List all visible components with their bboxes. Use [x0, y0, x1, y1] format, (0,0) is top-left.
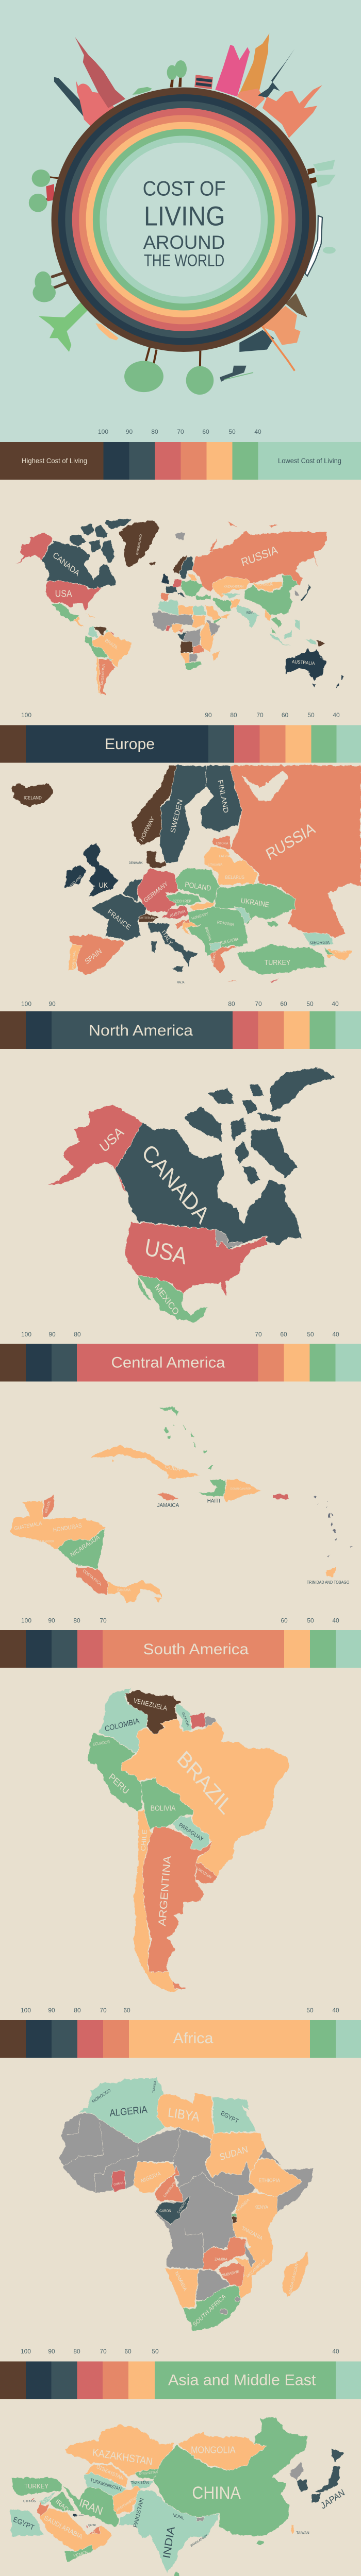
- South America country labels: PERU: [107, 1771, 131, 1797]
- Europe country labels: SWITZERLAND: [139, 917, 156, 920]
- Asia country labels: IRAQ: [54, 2497, 70, 2514]
- Africa country labels: LIBYA: [167, 2105, 200, 2125]
- map: world: [14, 518, 344, 696]
- Africa country labels: KENYA: [254, 2204, 268, 2210]
- legend bar: Asia and Middle East: [0, 2348, 361, 2399]
- world country labels: AUSTRALIA: [292, 659, 315, 666]
- North America country labels: CANADA: [137, 1139, 214, 1229]
- Europe country labels: CZECH REP: [173, 900, 191, 904]
- Central America country labels: JAMAICA: [157, 1502, 179, 1509]
- Asia country labels: JAPAN: [319, 2487, 347, 2511]
- legend bar: Africa: 90: [48, 2007, 55, 2014]
- legend bar: highest to lowest cost of living: Lowest Cost of Living: [278, 456, 341, 465]
- legend bar: North America: [0, 1001, 361, 1049]
- title: COST OF: [143, 177, 225, 200]
- Europe country labels: BELARUS: [225, 875, 244, 880]
- Central America country labels: EL SALVADOR: [36, 1540, 54, 1544]
- Asia country labels: QATAR: [88, 2524, 96, 2527]
- legend bar: Europe: [0, 711, 361, 762]
- Europe country labels: PORTUGAL: [72, 950, 76, 970]
- legend bar: Africa: 80: [74, 2007, 81, 2014]
- Central America country labels: [14, 1463, 349, 1592]
- Europe country labels: ESTONIA: [216, 842, 228, 845]
- Europe country labels: DENMARK: [129, 862, 143, 865]
- Africa country labels: GHANA: [113, 2181, 124, 2187]
- Asia country labels: UZBEKISTAN: [95, 2464, 124, 2482]
- Africa country labels: ETHIOPIA: [258, 2178, 281, 2184]
- Europe country labels: POLAND: [185, 880, 212, 892]
- world country labels: USA: [55, 588, 72, 599]
- legend bar: Europe: 80: [230, 711, 237, 719]
- Central America country labels: TRINIDAD AND TOBAGO: [307, 1580, 349, 1585]
- Asia country labels: YEMEN: [73, 2549, 88, 2559]
- legend bar: Central America: [0, 1331, 361, 1382]
- Europe country labels: MALTA: [177, 981, 185, 985]
- title: LIVING: [144, 201, 225, 231]
- Africa country labels: UGANDA: [236, 2197, 251, 2213]
- Asia country labels: [12, 2444, 347, 2560]
- Europe country labels: FINLAND: [216, 779, 229, 814]
- legend bar: Europe: Europe: [105, 736, 155, 753]
- Africa country labels: SUDAN: [219, 2143, 249, 2163]
- Central America country labels: HAITI: [207, 1498, 220, 1504]
- Asia country labels: PAKISTAN: [133, 2498, 145, 2529]
- Africa country shapes: [59, 2078, 313, 2331]
- Asia country labels: AFGHANISTAN: [116, 2496, 137, 2512]
- legend bar: Europe: 50: [307, 711, 315, 719]
- landmarks on top of globe: [29, 33, 336, 395]
- world country labels: CANADA: [51, 550, 81, 579]
- legend bar: Europe: 70: [256, 711, 264, 719]
- legend bar: Central America: 40: [332, 1331, 339, 1338]
- legend bar: North America: North America: [89, 1022, 193, 1039]
- legend bar: Central America: 80: [74, 1331, 81, 1338]
- North America country labels: [97, 1124, 214, 1317]
- world country labels: GREENLAND: [136, 534, 143, 555]
- Asia country labels: CYPRUS: [23, 2499, 36, 2503]
- Africa country labels: ZAMBIA: [215, 2257, 227, 2261]
- Europe country labels: LATVIA: [219, 855, 230, 858]
- Asia country labels: UAE: [90, 2531, 96, 2534]
- South America country labels: URUGUAY: [196, 1866, 213, 1880]
- South America country labels: VENEZUELA: [133, 1697, 168, 1712]
- legend bar: Asia and Middle East: 70: [100, 2348, 107, 2355]
- South America country labels: COLOMBIA: [104, 1716, 140, 1733]
- world country labels: MONGOLIA: [257, 583, 273, 586]
- Africa country labels: SOUTH AFRICA: [192, 2293, 227, 2328]
- legend bar: Asia and Middle East: 80: [73, 2348, 80, 2355]
- Europe country labels: GREECE: [211, 951, 217, 965]
- legend bar: Asia and Middle East: 100: [21, 2348, 31, 2355]
- Europe country labels: [24, 779, 347, 985]
- Asia country labels: TURKMENISTAN: [90, 2477, 122, 2492]
- legend bar: Africa: 40: [332, 2007, 339, 2014]
- Europe country labels: NORWAY: [139, 816, 156, 843]
- South America country labels: BOLIVIA: [151, 1804, 175, 1812]
- Asia country labels: EGYPT: [12, 2515, 35, 2532]
- Central America country labels: GUATEMALA: [14, 1520, 43, 1532]
- legend bar: Central America: 100: [21, 1331, 31, 1338]
- Africa country labels: NAMIBIA: [174, 2270, 188, 2293]
- Central America country labels: CUBA: [165, 1463, 181, 1473]
- Asia country labels: KAZAKHSTAN: [92, 2447, 153, 2468]
- Europe country labels: TURKEY: [265, 958, 290, 967]
- Africa country labels: GABON: [159, 2209, 171, 2213]
- Africa country labels: ZIMBABWE: [221, 2269, 240, 2278]
- Africa country labels: CONGO: [177, 2201, 187, 2214]
- legend bar: Central America: 60: [280, 1331, 287, 1338]
- Central America country shapes: [10, 1406, 353, 1603]
- Asia country labels: SAUDI ARABIA: [43, 2514, 84, 2541]
- South America country labels: CHILE: [139, 1829, 149, 1852]
- Asia country labels: NEPAL: [172, 2513, 185, 2521]
- legend bar: Central America: 70: [255, 1331, 262, 1338]
- Europe country labels: ITALY: [160, 929, 173, 947]
- Europe country labels: AUSTRIA: [170, 909, 186, 918]
- Africa country labels: CAMEROON: [163, 2180, 177, 2198]
- map: Central America: [10, 1406, 353, 1603]
- map: Africa: [59, 2078, 313, 2331]
- legend bar: South America: 50: [307, 1617, 314, 1624]
- legend bar: highest to lowest cost of living: 100: [98, 428, 108, 435]
- South America country labels: GUYANA: [181, 1711, 190, 1727]
- legend bar: South America: 40: [332, 1617, 339, 1624]
- map: Europe: [11, 766, 361, 985]
- world country labels: [51, 534, 315, 686]
- legend bar: highest to lowest cost of living: Highest Cost of Living: [22, 456, 87, 465]
- legend bar: South America: South America: [143, 1641, 249, 1658]
- Europe country labels: RUSSIA: [264, 819, 318, 864]
- legend bar: South America: 70: [100, 1617, 107, 1624]
- world country labels: RUSSIA: [240, 544, 280, 569]
- Europe country labels: SPAIN: [84, 947, 103, 966]
- legend bar: highest to lowest cost of living: 70: [177, 428, 184, 435]
- legend bar: Asia and Middle East: 60: [124, 2348, 132, 2355]
- Africa country labels: ALGERIA: [109, 2104, 148, 2119]
- Africa country labels: MOROCCO: [91, 2088, 111, 2104]
- legend bar: highest to lowest cost of living: [0, 428, 361, 480]
- legend bar: South America: [0, 1617, 361, 1668]
- Europe country labels: SERBIA: [204, 926, 212, 941]
- Asia country labels: KUWAIT: [77, 2514, 85, 2517]
- Europe country labels: SWEDEN: [169, 799, 185, 834]
- Central America country labels: HONDURAS: [53, 1522, 82, 1534]
- South America country labels: ARGENTINA: [156, 1855, 173, 1927]
- Asia country labels: CHINA: [192, 2482, 241, 2502]
- legend bar: Asia and Middle East: 40: [332, 2348, 339, 2355]
- legend bar: Africa: 50: [306, 2007, 314, 2014]
- legend bar: Asia and Middle East: Asia and Middle East: [168, 2372, 316, 2388]
- Europe country labels: UK: [99, 881, 108, 889]
- title: [143, 177, 225, 269]
- legend bar: Africa: [0, 2007, 361, 2058]
- title: AROUND: [143, 231, 225, 253]
- world country labels: KAZAKHSTAN: [224, 585, 243, 588]
- legend bar: South America: 90: [48, 1617, 55, 1624]
- Europe country labels: ICELAND: [24, 795, 42, 801]
- legend bar: North America: 50: [306, 1001, 314, 1008]
- legend bar: Europe: 40: [333, 711, 340, 719]
- Central America country labels: BELIZE: [44, 1500, 52, 1514]
- Europe country labels: IRELAND: [70, 875, 83, 888]
- map: North America: [47, 1067, 335, 1323]
- Europe country shapes: [11, 766, 361, 984]
- Asia country labels: MONGOLIA: [191, 2444, 236, 2455]
- title: THE WORLD: [144, 251, 224, 269]
- hero: globe with landmarks: [29, 33, 336, 395]
- Asia country labels: TAJIKISTAN: [131, 2481, 149, 2485]
- legend bar: South America: 100: [21, 1617, 31, 1624]
- legend bar: Africa: Africa: [173, 2030, 214, 2047]
- legend bar: Africa: 100: [21, 2007, 31, 2014]
- legend bar: Central America: Central America: [111, 1354, 225, 1371]
- legend bar: Europe: 60: [282, 711, 288, 719]
- globe rings: [52, 88, 316, 352]
- world country labels: INDIA: [246, 612, 254, 615]
- legend bar: North America: 70: [255, 1001, 262, 1008]
- Asia country labels: TURKEY: [24, 2482, 49, 2490]
- Asia country labels: IRAN: [78, 2497, 104, 2518]
- Asia country labels: BANGLADESH: [190, 2534, 208, 2548]
- map: South America: [88, 1688, 290, 1993]
- Europe country labels: ARMENIA: [335, 951, 347, 954]
- Central America country labels: PANAMA: [117, 1588, 131, 1592]
- Asia country labels: SYRIA: [41, 2493, 55, 2504]
- South America country shapes: [88, 1688, 290, 1993]
- legend bar: North America: 90: [48, 1001, 56, 1008]
- Europe country labels: LITHUANIA: [208, 863, 223, 867]
- legend bar: highest to lowest cost of living: 60: [202, 428, 209, 435]
- South America country labels: [92, 1697, 237, 1927]
- world country labels: BRAZIL: [104, 637, 119, 651]
- legend bar: South America: 60: [281, 1617, 288, 1624]
- legend bar: highest to lowest cost of living: 90: [126, 428, 133, 435]
- legend bar: North America: 80: [228, 1001, 235, 1008]
- Central America country labels: DOMINICAN REP: [231, 1487, 251, 1490]
- Africa country labels: NIGERIA: [140, 2171, 161, 2184]
- legend bar: South America: 80: [73, 1617, 80, 1624]
- map: Asia and Middle East: [10, 2418, 347, 2576]
- Asia country shapes: [10, 2418, 345, 2576]
- Africa country labels: [91, 2080, 299, 2328]
- Europe country labels: FRANCE: [106, 907, 132, 931]
- South America country labels: PARAGUAY: [178, 1822, 204, 1843]
- North America country labels: USA: [142, 1234, 189, 1270]
- legend bar: Africa: 70: [100, 2007, 107, 2014]
- legend bar: highest to lowest cost of living: 40: [254, 428, 261, 435]
- Europe country labels: ROMANIA: [217, 920, 235, 927]
- Asia country labels: KYRGYZSTAN: [139, 2471, 158, 2476]
- North America country shapes: [47, 1067, 335, 1323]
- South America country labels: BRAZIL: [173, 1746, 237, 1819]
- Europe country labels: BULGARIA: [220, 936, 239, 945]
- legend bar: highest to lowest cost of living: 80: [151, 428, 158, 435]
- legend bar: Europe: 100: [21, 711, 31, 719]
- North America country labels: MEXICO: [153, 1281, 181, 1317]
- Africa country labels: MADAGASCAR: [288, 2263, 299, 2295]
- Asia country labels: TAIWAN: [296, 2530, 309, 2535]
- world country shapes: [14, 518, 344, 696]
- Asia country labels: INDIA: [160, 2525, 177, 2560]
- Africa country labels: EGYPT: [220, 2110, 239, 2125]
- Central America country labels: COSTA RICA: [82, 1568, 103, 1587]
- Europe country labels: GERMANY: [143, 880, 169, 904]
- Africa country labels: TUNISIA: [152, 2080, 157, 2093]
- Central America country labels: NICARAGUA: [70, 1534, 101, 1558]
- legend bar: Central America: 50: [307, 1331, 314, 1338]
- Europe country labels: GEORGIA: [310, 940, 330, 945]
- North America country labels: USA: [97, 1124, 126, 1156]
- Europe country labels: HUNGARY: [191, 911, 209, 921]
- South America country labels: ECUADOR: [92, 1739, 110, 1747]
- legend bar: North America: 40: [332, 1001, 339, 1008]
- Europe country labels: UKRAINE: [240, 896, 270, 909]
- legend bar: North America: 100: [21, 1001, 31, 1008]
- legend bar: Europe: 90: [205, 711, 212, 719]
- Africa country labels: TANZANIA: [241, 2225, 264, 2242]
- legend bar: Central America: 90: [48, 1331, 56, 1338]
- Africa country labels: MOZAMBIQUE: [245, 2258, 267, 2279]
- legend bar: Asia and Middle East: 90: [48, 2348, 55, 2355]
- legend bar: North America: 60: [280, 1001, 287, 1008]
- world country labels: ARGENTINA: [101, 664, 106, 686]
- legend bar: Africa: 60: [123, 2007, 130, 2014]
- legend bar: Asia and Middle East: 50: [152, 2348, 159, 2355]
- legend bar: highest to lowest cost of living: 50: [228, 428, 236, 435]
